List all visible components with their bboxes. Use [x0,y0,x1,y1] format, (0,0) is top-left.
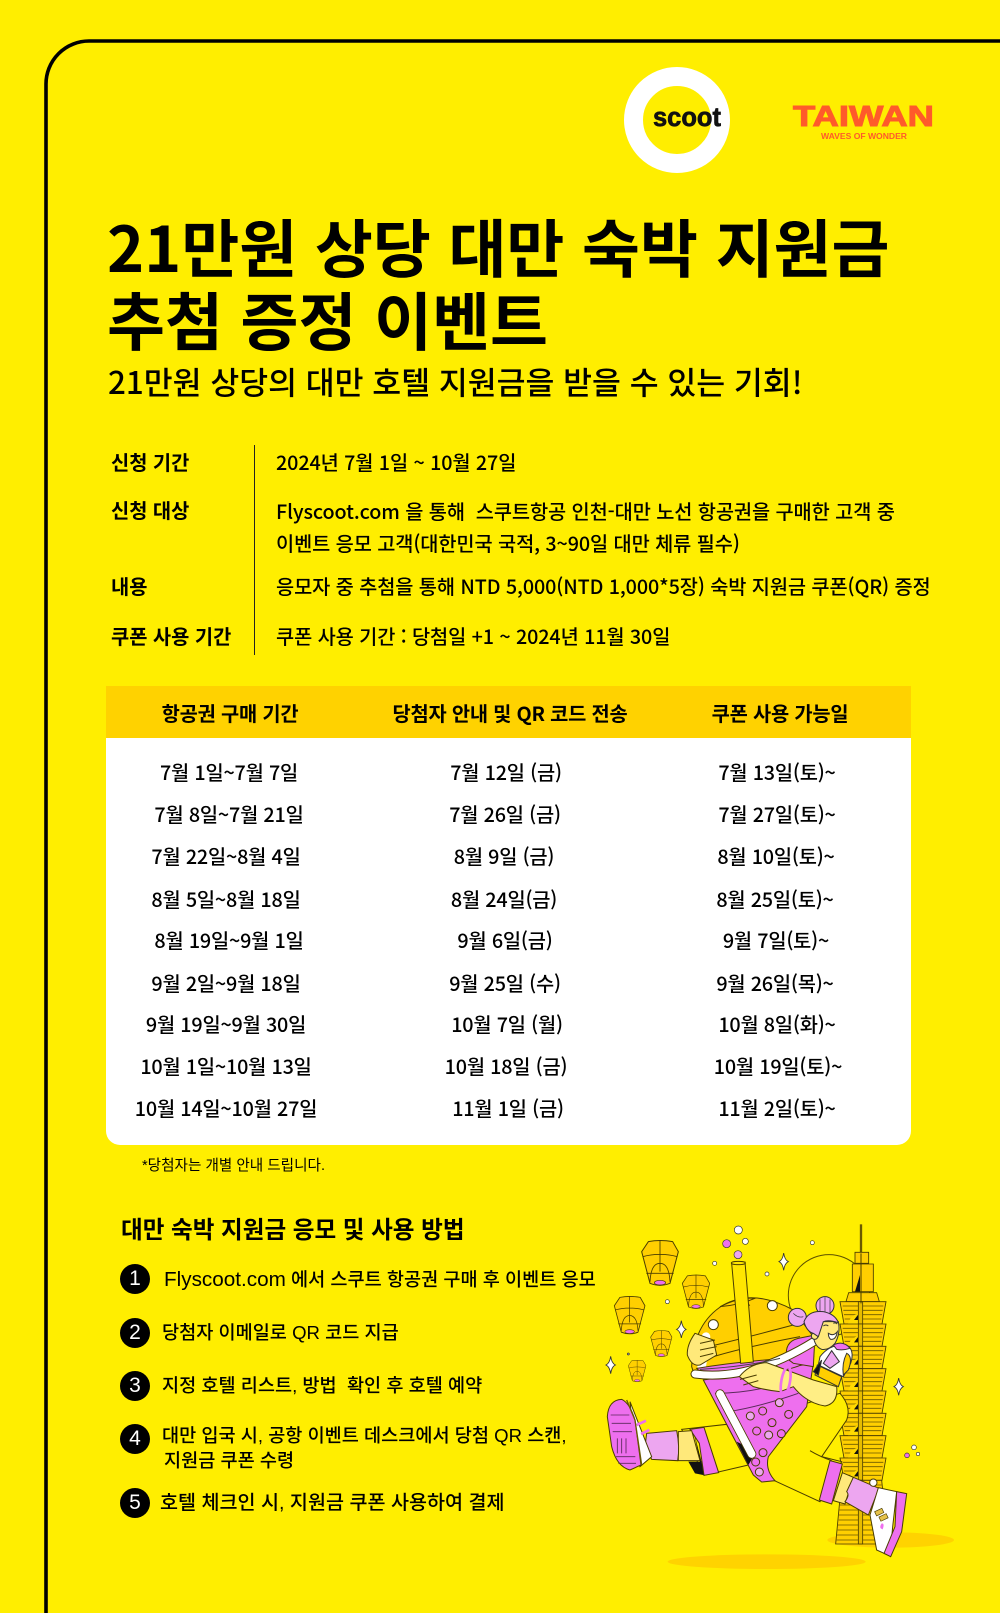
step 4 [120,1424,567,1471]
icon: number 2 [120,1318,150,1348]
row 5: 9월 7일(토)~ [723,925,829,954]
girl arm [739,1363,837,1406]
row 6: 9월 25일 (수) [449,968,561,997]
row 2: 7월 26일 (금) [449,799,561,828]
row 2: 7월 8일~7월 21일 [154,799,304,828]
illustration: girl hugging bubble tea with Taipei 101 and lanterns [605,1224,954,1569]
row 2 [154,799,836,828]
scoot logo: scoot [653,102,721,132]
row 1: 7월 12일 (금) [450,757,562,786]
step 4 text [162,1425,567,1471]
how-to heading: 대만 숙박 지원금 응모 및 사용 방법 [121,1211,465,1245]
schedule table [106,686,911,1145]
step 3 text: 지정 호텔 리스트, 방법 확인 후 호텔 예약 [162,1375,482,1396]
row 7 [146,1009,836,1038]
row 6: 9월 26일(목)~ [716,968,834,997]
row 9: 11월 2일(토)~ [718,1093,836,1122]
header: purchase period: 항공권 구매 기간 [162,698,298,727]
icon: number 4: 4 [129,1427,141,1450]
value: coupon period: 쿠폰 사용 기간 : 당첨일 +1 ~ 2024년 11월 30일 [276,621,670,650]
row 8: 10월 18일 (금) [445,1051,567,1080]
label: coupon period: 쿠폰 사용 기간 [111,621,231,650]
icon: number 2: 2 [129,1321,141,1344]
Taiwan logo: TAIWAN [793,101,934,133]
label: eligibility: 신청 대상 [111,495,189,524]
row 7: 10월 8일(화)~ [718,1009,836,1038]
row 5: 9월 6일(금) [457,925,553,954]
event details [111,445,931,655]
step 1 [120,1264,596,1294]
step 4 text: 대만 입국 시, 공항 이벤트 데스크에서 당첨 QR 스캔, [162,1425,567,1446]
row 4: 8월 5일~8월 18일 [151,884,301,913]
step 2 text: 당첨자 이메일로 QR 코드 지급 [162,1322,399,1343]
detail divider [254,445,255,655]
title: 추첨 증정 이벤트 [107,273,548,364]
row 1: 7월 1일~7월 7일 [160,757,298,786]
row 8 [140,1051,842,1080]
icon: number 4 [120,1424,150,1454]
row 9 [135,1093,836,1122]
row 5: 8월 19일~9월 1일 [154,925,304,954]
value: eligibility: Flyscoot.com 을 통해 스쿠트항공 인천-대만 노선 항공권을 구매한 고객 중 [276,496,895,525]
scoot logo [624,67,730,173]
step 1 text: Flyscoot.com 에서 스쿠트 항공권 구매 후 이벤트 응모 [164,1268,596,1291]
shadows [668,1532,954,1569]
header: winner notice: 당첨자 안내 및 QR 코드 전송 [392,698,628,727]
row 6: 9월 2일~9월 18일 [151,968,301,997]
step 4 text: 지원금 쿠폰 수령 [164,1450,294,1471]
icon: number 3: 3 [129,1374,141,1397]
row 9: 10월 14일~10월 27일 [135,1093,317,1122]
lanterns [614,1240,710,1382]
row 3 [151,841,835,870]
value: eligibility: 이벤트 응모 고객(대한민국 국적, 3~90일 대만 체류 필수) [276,528,740,557]
row 4: 8월 25일(토)~ [716,884,834,913]
row 4 [151,884,834,913]
step 3 [120,1371,482,1401]
Taiwan logo [792,101,934,141]
row 8: 10월 1일~10월 13일 [140,1051,312,1080]
Taiwan logo: WAVES OF WONDER [821,132,907,141]
label: application period: 신청 기간 [111,447,189,476]
body and legs [607,1393,907,1557]
bubble tea cup [687,1261,822,1482]
row 6 [151,968,834,997]
value: content: 응모자 중 추첨을 통해 NTD 5,000(NTD 1,000*5장) 숙박 지원금 쿠폰(QR) 증정 [276,571,931,600]
step 5 text: 호텔 체크인 시, 지원금 쿠폰 사용하여 결제 [160,1492,505,1514]
row 4: 8월 24일(금) [451,884,557,913]
title [107,200,889,364]
row 8: 10월 19일(토)~ [714,1051,842,1080]
row 1: 7월 13일(토)~ [718,757,836,786]
title: 21만원 상당 대만 숙박 지원금 [107,200,889,291]
row 1 [160,757,836,786]
row 5 [154,925,829,954]
bubbles [627,1226,920,1458]
icon: number 1 [120,1264,150,1294]
girl shirt and head [788,1297,852,1387]
row 3: 8월 9일 (금) [454,841,554,870]
icon: number 1: 1 [129,1267,141,1290]
value: application period: 2024년 7월 1일 ~ 10월 27일 [276,447,516,476]
row 3: 7월 22일~8월 4일 [151,841,301,870]
table header [106,686,911,738]
icon: number 5: 5 [129,1491,141,1514]
sparkles [606,1253,903,1395]
row 9: 11월 1일 (금) [452,1093,564,1122]
table footnote: *당첨자는 개별 안내 드립니다. [142,1158,325,1174]
label: content: 내용 [111,571,147,600]
value: eligibility [276,496,895,557]
icon: number 5 [120,1488,150,1518]
row 3: 8월 10일(토)~ [717,841,835,870]
step 5 [120,1488,505,1518]
row 2: 7월 27일(토)~ [718,799,836,828]
row 7: 9월 19일~9월 30일 [146,1009,306,1038]
subtitle: 21만원 상당의 대만 호텔 지원금을 받을 수 있는 기회! [108,359,802,404]
step 2 [120,1318,399,1348]
row 7: 10월 7일 (월) [451,1009,563,1038]
icon: number 3 [120,1371,150,1401]
header: coupon date: 쿠폰 사용 가능일 [712,698,848,727]
Taipei 101 tower [836,1224,888,1544]
sun outline [788,1255,870,1336]
